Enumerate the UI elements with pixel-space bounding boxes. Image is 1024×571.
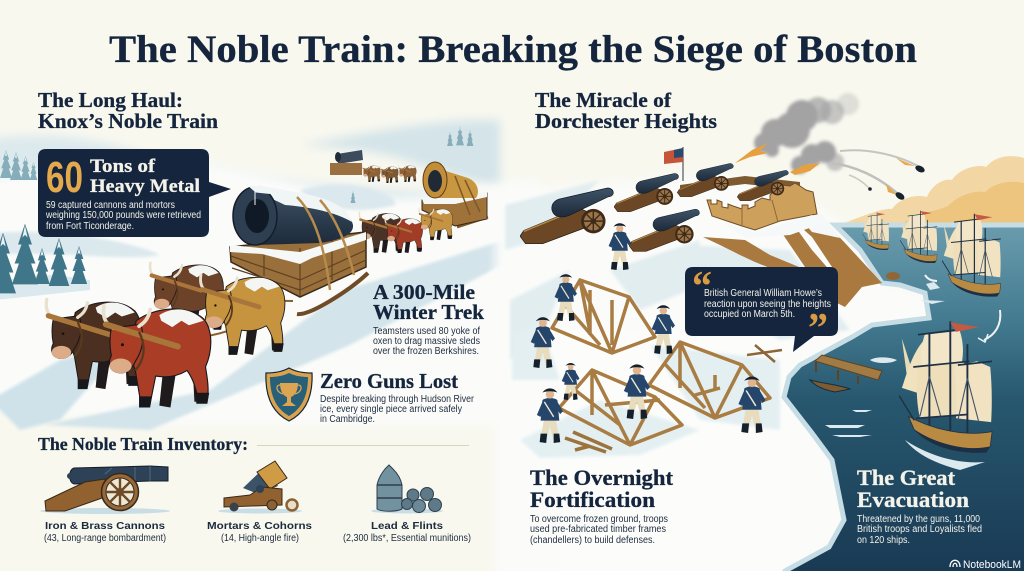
title: The Noble Train: Breaking the Siege of Boston <box>109 28 917 71</box>
callout: howe quote: reaction upon seeing the heights <box>704 299 831 310</box>
text: mortars and cohorns: Mortars & Cohorns <box>207 521 313 532</box>
timber frames <box>552 280 782 452</box>
callout: 60 tons of heavy metal: Tons of <box>90 156 156 177</box>
big sled with iron cannon <box>230 185 368 314</box>
current arrows <box>925 275 1000 342</box>
heading: inventory: The Noble Train Inventory: <box>38 434 248 454</box>
text: a 300-mile winter trek: Winter Trek <box>373 300 484 324</box>
far ox train with cannon <box>330 150 416 183</box>
text: zero guns lost: Despite breaking through Hudson River <box>320 394 475 405</box>
inventory: mortars and cohorns <box>218 461 302 514</box>
sea <box>770 225 1024 571</box>
dock and rowboat <box>810 355 882 392</box>
text: overnight fortification: The Overnight <box>530 465 674 490</box>
second sled with brass cannon <box>422 162 488 227</box>
second ox team <box>359 208 453 253</box>
callout: 60 tons of heavy metal <box>38 149 231 237</box>
text: great evacuation: British troops and Loyalists fled <box>857 524 982 535</box>
callout: howe quote <box>685 264 838 352</box>
text: a 300-mile winter trek <box>373 280 484 357</box>
text: great evacuation: Threatened by the guns, 11,000 <box>857 514 980 525</box>
text: a 300-mile winter trek: over the frozen Berkshires. <box>373 346 479 357</box>
text: zero guns lost <box>320 369 475 425</box>
text: great evacuation: on 120 ships. <box>857 535 910 546</box>
text: mortars and cohorns: (14, High-angle fire) <box>221 533 299 544</box>
heading: miracle of dorchester heights: Dorchester Heights <box>535 109 717 133</box>
heights snow hill <box>495 175 934 571</box>
callout: howe quote: British General William Howe’s <box>704 288 822 299</box>
smoke <box>754 93 859 174</box>
text: overnight fortification: Fortification <box>530 487 655 512</box>
cannons on the heights <box>520 163 788 251</box>
text: mortars and cohorns <box>207 521 313 544</box>
text: great evacuation <box>857 465 982 546</box>
pine trees <box>0 224 90 300</box>
text: zero guns lost: Zero Guns Lost <box>320 369 458 393</box>
wall fortification <box>680 176 826 238</box>
text: a 300-mile winter trek: oxen to drag massive sleds <box>373 336 480 347</box>
text: lead and flints: (2,300 lbs*, Essential munitions) <box>343 533 471 544</box>
heading: the long haul <box>38 88 218 133</box>
heading: the long haul: Knox’s Noble Train <box>38 109 218 133</box>
callout: 60 tons of heavy metal: from Fort Ticonderage. <box>46 221 134 232</box>
callout: howe quote: occupied on March 5th. <box>704 309 795 320</box>
text: overnight fortification: used pre-fabricated timber frames <box>530 524 666 535</box>
sled rope <box>155 300 293 338</box>
text: overnight fortification <box>530 465 674 546</box>
distant pine trees <box>0 127 473 203</box>
text: a 300-mile winter trek: A 300-Mile <box>373 280 475 304</box>
text: zero guns lost: ice, every single piece arrived safely <box>320 404 462 415</box>
text: great evacuation: Evacuation <box>857 487 969 512</box>
text: overnight fortification: To overcome frozen ground, troops <box>530 514 668 525</box>
notebooklm badge: NotebookLM <box>963 559 1021 571</box>
text: lead and flints: Lead & Flints <box>371 521 443 532</box>
heading: miracle of dorchester heights: The Miracle of <box>535 88 672 112</box>
revolutionary soldiers <box>531 223 766 443</box>
callout: howe quote: “ <box>692 264 712 310</box>
callout: howe quote: ” <box>808 306 828 352</box>
front ox team <box>46 263 285 407</box>
ice floes and waves <box>825 282 985 470</box>
inventory: iron and brass cannons <box>40 466 170 514</box>
callout: 60 tons of heavy metal: weighing 150,000 pounds were retrieved <box>45 210 201 221</box>
inventory: lead and flints <box>371 465 443 514</box>
cannon fire and shots <box>735 143 926 201</box>
icon: trophy shield <box>266 368 312 421</box>
callout: 60 tons of heavy metal: 59 captured cannons and mortors <box>46 200 175 211</box>
sunset clouds <box>835 156 1024 226</box>
text: great evacuation: The Great <box>857 465 956 490</box>
text: iron and brass cannons: Iron & Brass Cannons <box>45 521 165 532</box>
callout: 60 tons of heavy metal: 60 <box>46 153 83 202</box>
heading: the long haul: The Long Haul: <box>38 88 183 112</box>
text: a 300-mile winter trek: Teamsters used 80 yoke of <box>373 326 480 337</box>
heading: miracle of dorchester heights <box>535 88 717 133</box>
text: zero guns lost: in Cambridge. <box>320 414 375 425</box>
flag <box>664 147 683 181</box>
cliff and rock <box>703 214 900 307</box>
text: overnight fortification: (chandellers) to build defenses. <box>530 535 655 546</box>
ships <box>862 211 1001 453</box>
callout: 60 tons of heavy metal: Heavy Metal <box>90 176 200 197</box>
winter landscape background <box>0 120 540 430</box>
text: lead and flints <box>343 521 471 544</box>
text: iron and brass cannons: (43, Long-range bombardment) <box>44 533 166 544</box>
text: iron and brass cannons <box>44 521 166 544</box>
